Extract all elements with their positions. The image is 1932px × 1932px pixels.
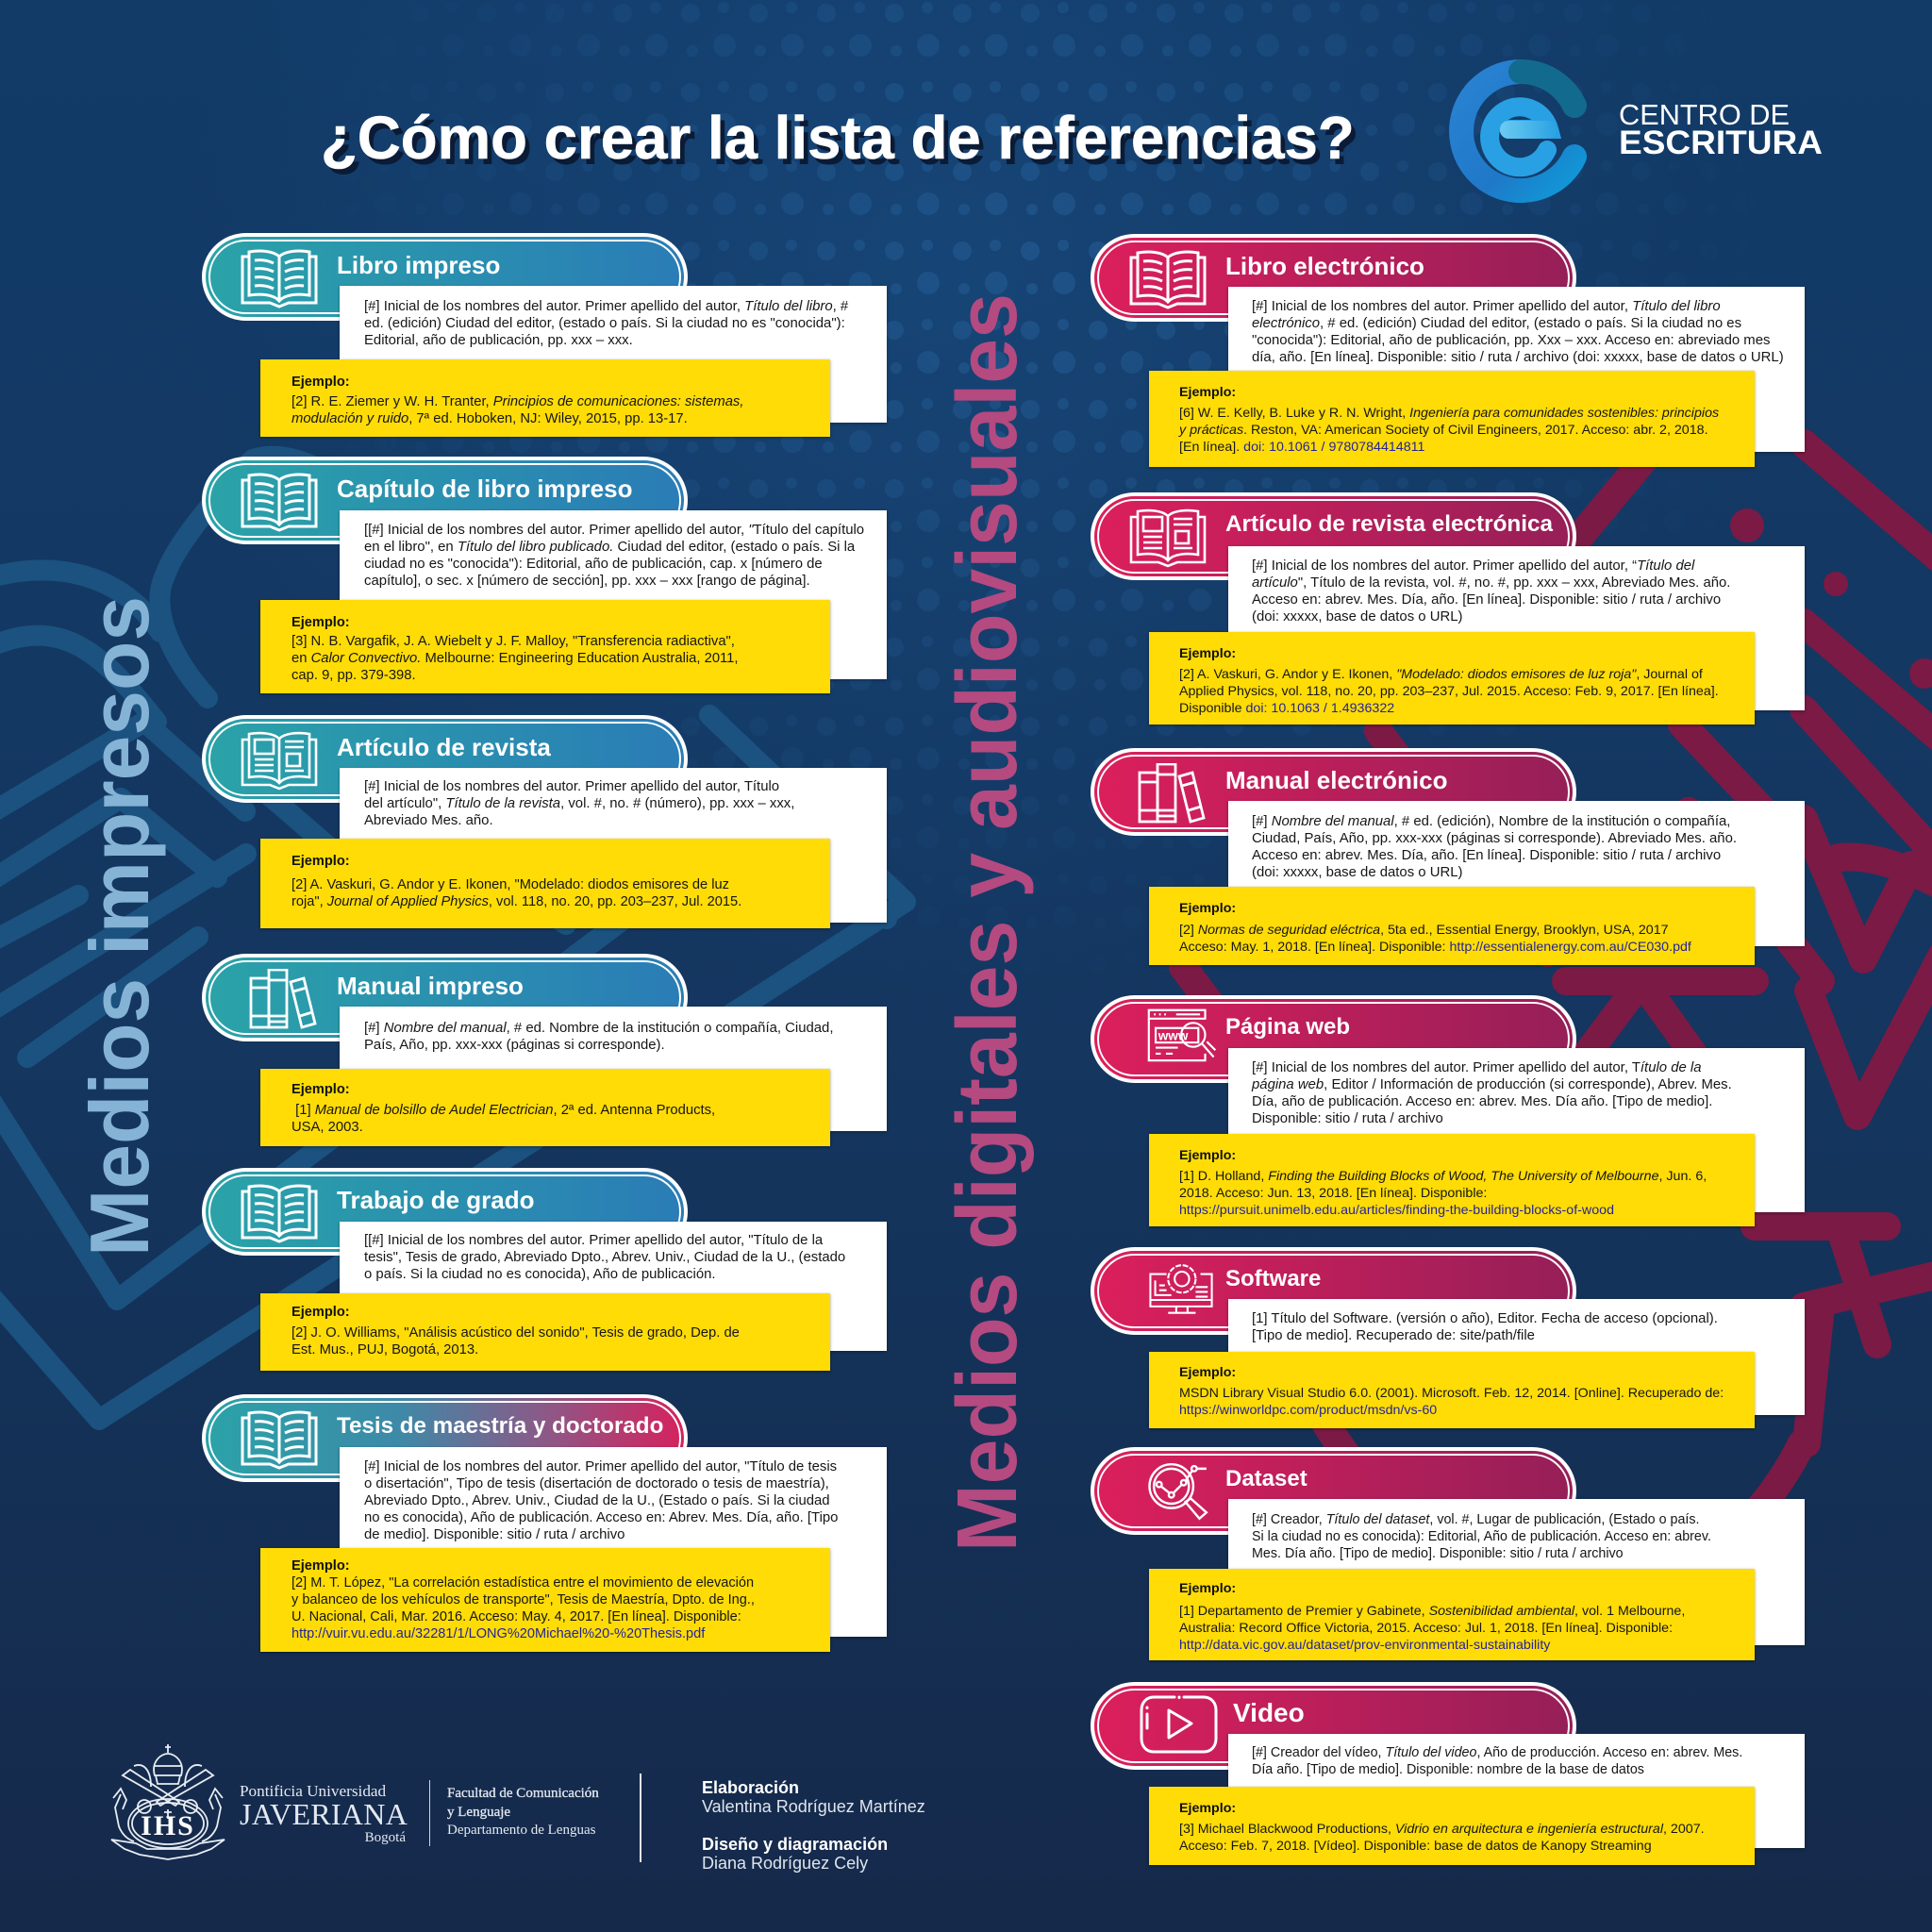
example box: [1] Departamento de Premier y Gabinete, Sostenibilidad ambiental, vol. 1 Melbourne, bbox=[1179, 1604, 1685, 1619]
heading pill: Tesis de maestría y doctorado bbox=[202, 1394, 688, 1482]
format box: [#] Inicial de los nombres del autor. Primer apellido del autor, Título del libro, # bbox=[364, 299, 848, 314]
example box bbox=[1149, 1352, 1755, 1428]
format box: [Tipo de medio]. Recuperado de: site/path/file bbox=[1252, 1328, 1535, 1343]
icon: open book bbox=[242, 1411, 317, 1470]
panel: Manual impreso bbox=[202, 954, 888, 1149]
format box bbox=[340, 1222, 887, 1351]
format box: capítulo], o sec. x [número de sección], pp. xxx – xxx [rango de página]. bbox=[364, 574, 810, 589]
format box: (doi: xxxxx, base de datos o URL) bbox=[1252, 865, 1462, 880]
format box: página web, Editor / Información de producción (si corresponde), Abrev. Mes. bbox=[1252, 1077, 1732, 1092]
example box: [2] A. Vaskuri, G. Andor y E. Ikonen, "Modelado: diodos emisores de luz roja", Journal of bbox=[1179, 667, 1703, 682]
icon: Javeriana crest bbox=[111, 1744, 225, 1860]
icon: www browser bbox=[1147, 1009, 1216, 1062]
icon: magazine bbox=[242, 732, 317, 791]
heading pill: Software bbox=[1091, 1247, 1576, 1335]
title: ¿Cómo crear la lista de referencias? bbox=[321, 105, 1355, 172]
format box: [#] Creador del vídeo, Título del video, Año de producción. Acceso en: abrev. Mes. bbox=[1252, 1745, 1742, 1760]
heading pill: Capítulo de libro impreso bbox=[202, 457, 688, 544]
credits: Diseño y diagramación bbox=[702, 1835, 888, 1854]
icon: open book bbox=[242, 1185, 317, 1243]
format box: o disertación", Tipo de tesis (disertación de doctorado o tesis de maestría), bbox=[364, 1476, 829, 1491]
heading pill: Artículo de revista: Artículo de revista bbox=[337, 733, 551, 761]
format box bbox=[340, 1447, 887, 1637]
panel: Software bbox=[1091, 1247, 1806, 1430]
format box: artículo", Título de la revista, vol. #, no. #, pp. xxx – xxx, Abreviado Mes. año. bbox=[1252, 575, 1730, 591]
heading pill: Libro impreso bbox=[202, 233, 688, 321]
format box bbox=[1228, 1499, 1805, 1645]
example box: Disponible doi: 10.1063 / 1.4936322 bbox=[1179, 701, 1394, 716]
format box: Mes. Día año. [Tipo de medio]. Disponible: sitio / ruta / archivo bbox=[1252, 1546, 1624, 1561]
heading pill: Manual impreso: Manual impreso bbox=[337, 972, 524, 1000]
format box: [1] Título del Software. (versión o año), Editor. Fecha de acceso (opcional). bbox=[1252, 1311, 1718, 1326]
text: Facultad de Comunicación y Lenguaje bbox=[429, 1780, 599, 1846]
heading pill: Libro electrónico: Libro electrónico bbox=[1225, 252, 1424, 280]
heading pill: Página web bbox=[1091, 995, 1576, 1083]
heading pill: Video: Video bbox=[1233, 1698, 1305, 1727]
example box: cap. 9, pp. 379-398. bbox=[291, 668, 416, 683]
panel: Libro electrónico bbox=[1091, 234, 1806, 470]
logo: Centro de Escritura: CENTRO DE bbox=[1619, 99, 1790, 131]
icon: Javeriana crest: IHS bbox=[141, 1810, 195, 1841]
example box bbox=[260, 839, 830, 928]
text: Pontificia Universidad Javeriana Bogotá: Pontificia Universidad bbox=[240, 1782, 386, 1800]
logo: Centro de Escritura: ESCRITURA bbox=[1619, 125, 1823, 161]
format box: País, Año, pp. xxx-xxx (páginas si corresponde). bbox=[364, 1038, 665, 1053]
example box: U. Nacional, Cali, Mar. 2016. Acceso: May. 4, 2017. [En línea]. Disponible: bbox=[291, 1609, 741, 1624]
heading pill: Tesis de maestría y doctorado: Tesis de maestría y doctorado bbox=[337, 1413, 663, 1439]
example box: y balanceo de los vehículos de transporte", Tesis de Maestría, Dpto. de Ing., bbox=[291, 1592, 755, 1607]
panel: Video bbox=[1091, 1682, 1806, 1867]
heading pill: Capítulo de libro impreso: Capítulo de libro impreso bbox=[337, 475, 632, 503]
format box: ciudad no es "conocida"): Editorial, año de publicación, cap. x [número de bbox=[364, 557, 823, 572]
example box bbox=[260, 600, 830, 693]
format box: Acceso en: abrev. Mes. Día, año. [En línea]. Disponible: sitio / ruta / archivo bbox=[1252, 848, 1721, 863]
format box: [#] Inicial de los nombres del autor. Primer apellido del autor, Título bbox=[364, 779, 779, 794]
footer: Javeriana logo bbox=[111, 1744, 599, 1860]
example box: Ejemplo: bbox=[291, 375, 350, 390]
example box: Ejemplo: bbox=[1179, 1581, 1236, 1596]
icon: video player bbox=[1140, 1696, 1217, 1753]
example box bbox=[260, 359, 830, 437]
example box: Ejemplo: bbox=[291, 1305, 350, 1320]
panel: Libro impreso bbox=[202, 233, 889, 440]
heading pill: Trabajo de grado bbox=[202, 1168, 688, 1256]
heading pill: Dataset bbox=[1091, 1447, 1576, 1535]
format box: Disponible: sitio / ruta / archivo bbox=[1252, 1111, 1443, 1126]
format box bbox=[340, 1007, 887, 1131]
format box: Abreviado Dpto., Abrev. Univ., Ciudad de la U., (Estado o país. Si la ciudad bbox=[364, 1493, 830, 1508]
format box: Editorial, año de publicación, pp. xxx – xxx. bbox=[364, 333, 633, 348]
format box: no es conocida), Año de publicación. Acceso en: Abrev. Mes. Día, año. [Tipo bbox=[364, 1510, 838, 1525]
format box: [#] Nombre del manual, # ed. Nombre de la institución o compañía, Ciudad, bbox=[364, 1021, 833, 1036]
example box: [2] R. E. Ziemer y W. H. Tranter, Principios de comunicaciones: sistemas, bbox=[291, 394, 743, 409]
example box: [3] Michael Blackwood Productions, Vidrio en arquitectura e ingeniería estructural, 2007. bbox=[1179, 1822, 1705, 1837]
heading pill: Manual electrónico: Manual electrónico bbox=[1225, 766, 1447, 794]
example box: Ejemplo: bbox=[291, 1558, 350, 1574]
format box bbox=[1228, 546, 1805, 710]
format box bbox=[340, 286, 887, 423]
example box: Ejemplo: bbox=[1179, 385, 1236, 400]
format box: [#] Inicial de los nombres del autor. Primer apellido del autor, "Título de tesis bbox=[364, 1459, 837, 1474]
example box bbox=[1149, 887, 1755, 965]
example box: [3] N. B. Vargafik, J. A. Wiebelt y J. F. Malloy, "Transferencia radiactiva", bbox=[291, 634, 735, 649]
heading pill: Trabajo de grado: Trabajo de grado bbox=[337, 1186, 534, 1214]
logo: Centro de Escritura bbox=[1449, 59, 1823, 203]
example box: en Calor Convectivo. Melbourne: Engineering Education Australia, 2011, bbox=[291, 651, 739, 666]
example box: [2] A. Vaskuri, G. Andor y E. Ikonen, "Modelado: diodos emisores de luz bbox=[291, 877, 729, 892]
heading pill: Dataset: Dataset bbox=[1225, 1466, 1307, 1491]
panel: Página web bbox=[1091, 995, 1806, 1228]
example box: [6] W. E. Kelly, B. Luke y R. N. Wright, Ingeniería para comunidades sostenibles: principios bbox=[1179, 406, 1719, 421]
example box: [2] M. T. López, "La correlación estadística entre el movimiento de elevación bbox=[291, 1575, 754, 1591]
heading pill: Libro impreso: Libro impreso bbox=[337, 251, 500, 279]
format box: [#] Creador, Título del dataset, vol. #, Lugar de publicación, (Estado o país. bbox=[1252, 1512, 1700, 1527]
example box: Ejemplo: bbox=[1179, 901, 1236, 916]
example box: Ejemplo: bbox=[291, 1082, 350, 1097]
format box bbox=[340, 768, 887, 923]
example box bbox=[1149, 1134, 1755, 1226]
format box: tesis", Tesis de grado, Abreviado Dpto., Abrev. Univ., Ciudad de la U., (estado bbox=[364, 1250, 845, 1265]
example box: https://winworldpc.com/product/msdn/vs-60 bbox=[1179, 1403, 1437, 1418]
format box: del artículo", Título de la revista, vol. #, no. # (número), pp. xxx – xxx, bbox=[364, 796, 794, 811]
format box: Si la ciudad no es conocida): Editorial, Año de publicación. Acceso en: abrev. bbox=[1252, 1529, 1711, 1544]
example box: Ejemplo: bbox=[1179, 646, 1236, 661]
format box: Día año. [Tipo de medio]. Disponible: nombre de la base de datos bbox=[1252, 1762, 1644, 1777]
heading pill: Video bbox=[1091, 1682, 1576, 1770]
format box bbox=[1228, 801, 1805, 946]
example box: [2] J. O. Williams, "Análisis acústico del sonido", Tesis de grado, Dep. de bbox=[291, 1325, 740, 1341]
example box: [2] Normas de seguridad eléctrica, 5ta ed., Essential Energy, Brooklyn, USA, 2017 bbox=[1179, 923, 1669, 938]
text: Pontificia Universidad Javeriana Bogotá: Bogotá bbox=[365, 1830, 406, 1845]
heading pill: Artículo de revista electrónica: Artículo de revista electrónica bbox=[1225, 511, 1553, 537]
example box bbox=[260, 1293, 830, 1371]
example box: http://vuir.vu.edu.au/32281/1/LONG%20Michael%20-%20Thesis.pdf bbox=[291, 1626, 705, 1641]
panel: Capítulo de libro impreso bbox=[202, 457, 889, 696]
example box: Acceso: Feb. 7, 2018. [Vídeo]. Disponible: base de datos de Kanopy Streaming bbox=[1179, 1839, 1652, 1854]
format box bbox=[1228, 1299, 1805, 1415]
text: Pontificia Universidad Javeriana Bogotá: JAVERIANA bbox=[240, 1797, 408, 1831]
icon: open book bbox=[242, 474, 317, 532]
format box bbox=[1228, 1734, 1805, 1848]
example box bbox=[260, 1069, 830, 1146]
example box bbox=[1149, 1569, 1755, 1660]
example box: roja", Journal of Applied Physics, vol. 118, no. 20, pp. 203–237, Jul. 2015. bbox=[291, 894, 741, 909]
credits bbox=[702, 1778, 925, 1873]
format box bbox=[1228, 287, 1805, 452]
format box: [[#] Inicial de los nombres del autor. Primer apellido del autor, "Título del capítulo bbox=[364, 523, 864, 538]
example box: Est. Mus., PUJ, Bogotá, 2013. bbox=[291, 1342, 478, 1357]
heading pill: Artículo de revista electrónica bbox=[1091, 492, 1576, 580]
example box bbox=[260, 1548, 830, 1652]
example box: y prácticas. Reston, VA: American Society of Civil Engineers, 2017. Acceso: abr. 2, 2018. bbox=[1179, 423, 1708, 438]
format box: [#] Nombre del manual, # ed. (edición), Nombre de la institución o compañía, bbox=[1252, 814, 1730, 829]
example box: Acceso: May. 1, 2018. [En línea]. Disponible: http://essentialenergy.com.au/CE030.pdf bbox=[1179, 940, 1691, 955]
example box bbox=[1149, 632, 1755, 724]
heading pill: Página web: Página web bbox=[1225, 1014, 1350, 1040]
format box bbox=[340, 510, 887, 679]
example box bbox=[1149, 371, 1755, 467]
format box: día, año. [En línea]. Disponible: sitio / ruta / archivo (doi: xxxxx, base de datos o URL) bbox=[1252, 350, 1784, 365]
heading pill: Artículo de revista bbox=[202, 715, 688, 803]
example box: Australia: Record Office Victoria, 2015. Acceso: Jul. 1, 2018. [En línea]. Disponible: bbox=[1179, 1621, 1673, 1636]
heading pill: Libro electrónico bbox=[1091, 234, 1576, 322]
example box bbox=[1149, 1787, 1755, 1865]
example box: USA, 2003. bbox=[291, 1120, 363, 1135]
icon: open book bbox=[242, 249, 317, 308]
panel: Manual electrónico bbox=[1091, 748, 1806, 968]
format box: Acceso en: abrev. Mes. Día, año. [En línea]. Disponible: sitio / ruta / archivo bbox=[1252, 592, 1721, 608]
icon: magnifier with chart bbox=[1148, 1463, 1208, 1521]
credits: Elaboración bbox=[702, 1778, 799, 1797]
example box: [En línea]. doi: 10.1061 / 9780784414811 bbox=[1179, 440, 1424, 455]
format box: Día, año de publicación. Acceso en: abrev. Mes. Día año. [Tipo de medio]. bbox=[1252, 1094, 1712, 1109]
example box: [1] D. Holland, Finding the Building Blocks of Wood, The University of Melbourne, Jun. 6, bbox=[1179, 1169, 1707, 1184]
format box: (doi: xxxxx, base de datos o URL) bbox=[1252, 609, 1462, 625]
format box: [#] Inicial de los nombres del autor. Primer apellido del autor, Título del libro bbox=[1252, 299, 1721, 314]
example box: [1] Manual de bolsillo de Audel Electrician, 2ª ed. Antenna Products, bbox=[295, 1103, 715, 1118]
example box: Ejemplo: bbox=[1179, 1365, 1236, 1380]
format box: [#] Inicial de los nombres del autor. Primer apellido del autor, Título de la bbox=[1252, 1060, 1702, 1075]
example box: MSDN Library Visual Studio 6.0. (2001). Microsoft. Feb. 12, 2014. [Online]. Recuperado de: bbox=[1179, 1386, 1724, 1401]
panel: Tesis de maestría y doctorado bbox=[202, 1394, 888, 1654]
example box: Ejemplo: bbox=[291, 615, 350, 630]
format box bbox=[1228, 1048, 1805, 1212]
icon: open book bbox=[1130, 251, 1206, 309]
icon: books bbox=[1138, 763, 1206, 824]
example box: Ejemplo: bbox=[1179, 1801, 1236, 1816]
icon: monitor and gear bbox=[1149, 1264, 1213, 1314]
credits: Valentina Rodríguez Martínez bbox=[702, 1797, 925, 1816]
format box: ed. (edición) Ciudad del editor, (estado o país. Si la ciudad no es "conocida"): bbox=[364, 316, 845, 331]
heading pill: Manual impreso bbox=[202, 954, 688, 1041]
format box: electrónico, # ed. (edición) Ciudad del editor, (estado o país. Si la ciudad no es bbox=[1252, 316, 1741, 331]
example box: Applied Physics, vol. 118, no. 20, pp. 203–237, Jul. 2015. Acceso: Feb. 9, 2017. [En línea]. bbox=[1179, 684, 1719, 699]
format box: o país. Si la ciudad no es conocida), Año de publicación. bbox=[364, 1267, 716, 1282]
heading pill: Software: Software bbox=[1225, 1266, 1321, 1291]
icon: magazine bbox=[1130, 509, 1206, 568]
example box: Ejemplo: bbox=[291, 854, 350, 869]
example box: https://pursuit.unimelb.edu.au/articles/finding-the-building-blocks-of-wood bbox=[1179, 1203, 1614, 1218]
example box: Ejemplo: bbox=[1179, 1148, 1236, 1163]
text: Facultad de Comunicación y Lenguaje: Facultad de Comunicación bbox=[447, 1786, 599, 1801]
format box: [#] Inicial de los nombres del autor. Primer apellido del autor, “Título del bbox=[1252, 558, 1694, 574]
icon: books bbox=[249, 969, 317, 1029]
panel: Artículo de revista electrónica bbox=[1091, 492, 1806, 726]
example box: http://data.vic.gov.au/dataset/prov-environmental-sustainability bbox=[1179, 1638, 1550, 1653]
format box: "conocida"): Editorial, año de publicación, pp. Xxx – xxx. Acceso en: abreviado mes bbox=[1252, 333, 1770, 348]
format box: Abreviado Mes. año. bbox=[364, 813, 493, 828]
format box: de medio]. Disponible: sitio / ruta / archivo bbox=[364, 1527, 625, 1542]
panel: Dataset bbox=[1091, 1447, 1806, 1662]
format box: en el libro", en Título del libro publicado. Ciudad del editor, (estado o país. Si la bbox=[364, 540, 855, 555]
format box: Ciudad, País, Año, pp. xxx-xxx (páginas si corresponde). Abreviado Mes. año. bbox=[1252, 831, 1737, 846]
text: Pontificia Universidad Javeriana Bogotá bbox=[240, 1782, 408, 1845]
panel: Artículo de revista bbox=[202, 715, 889, 930]
format box: [[#] Inicial de los nombres del autor. Primer apellido del autor, "Título de la bbox=[364, 1233, 823, 1248]
heading pill: Manual electrónico bbox=[1091, 748, 1576, 836]
text: Facultad de Comunicación y Lenguaje: Departamento de Lenguas bbox=[447, 1823, 595, 1838]
credits: Diana Rodríguez Cely bbox=[702, 1854, 868, 1873]
panel: Trabajo de grado bbox=[202, 1168, 888, 1373]
example box: 2018. Acceso: Jun. 13, 2018. [En línea]. Disponible: bbox=[1179, 1186, 1487, 1201]
example box: modulación y ruido, 7ª ed. Hoboken, NJ: Wiley, 2015, pp. 13-17. bbox=[291, 411, 688, 426]
text: Facultad de Comunicación y Lenguaje: y Lenguaje bbox=[447, 1804, 510, 1819]
